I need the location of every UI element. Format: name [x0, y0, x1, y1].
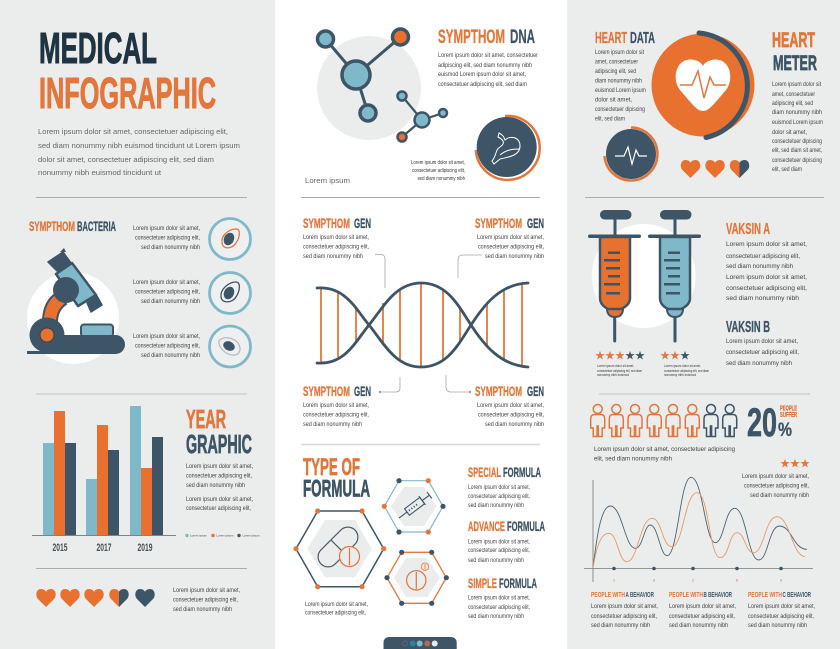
block: vaksin b [726, 319, 799, 367]
tiny text: vaksin a [597, 364, 642, 377]
block: vaksin a: VAKSIN A [726, 221, 770, 238]
pager [384, 637, 457, 649]
text: year graphic: Lorem ipsum dolor sit amet, [186, 496, 253, 503]
block: advance formula: consectetuer adipiscing elit, [468, 547, 530, 554]
icon row: small hearts [681, 160, 749, 178]
label: gen top right: SYMPTHOM [475, 215, 522, 231]
block: simple formula: FORMULA [499, 575, 537, 591]
text: stomach note: sed diam nonummy nibh [418, 176, 465, 182]
icon: bacteria 3 [210, 326, 250, 367]
block: behavior a: A BEHAVIOR [626, 590, 654, 599]
line chart: 2 [692, 578, 695, 582]
text: chart note: Lorem ipsum dolor sit amet, [742, 473, 809, 480]
text: symptom dna [438, 52, 539, 88]
intro text block: Lorem ipsum dolor sit amet, consectetuer adipiscing elit, [38, 127, 228, 136]
text: under capsule: Lorem ipsum dolor sit amet, [305, 601, 368, 608]
rating stars: chart: ★ [800, 456, 810, 470]
block: simple formula: Lorem ipsum dolor sit amet, [468, 594, 530, 602]
label: gen top left: sed diam nonummy nibh [303, 253, 363, 260]
heading: symptom dna: SYMPTHOM [438, 27, 505, 48]
label: gen top right: sed diam nonummy nibh [485, 253, 544, 260]
block: behavior b: B BEHAVIOR [704, 590, 732, 599]
rating stars: vaksin a: ★ [615, 348, 625, 362]
text: hearts: sed diam nonummy nibh [173, 606, 232, 613]
label: gen top left: GEN [354, 215, 371, 231]
heading: type of formula: FORMULA [303, 476, 370, 502]
text: symptom dna: Lorem ipsum dolor sit amet, consectetuer [438, 52, 539, 59]
block: simple formula [468, 575, 537, 620]
text: symptom dna: euismod Lorem ipsum dolor sit amet, [438, 71, 526, 78]
text: heart meter: amet, consectetuer [772, 91, 816, 98]
block: advance formula [468, 518, 545, 564]
rating stars: vaksin a: ★ [605, 348, 615, 362]
icon: syringe hexagon [382, 478, 446, 535]
heading: type of formula [303, 454, 370, 502]
block: vaksin a: sed diam nonummy nibh [726, 295, 799, 302]
icon: molecules [317, 29, 447, 142]
block: behavior c: Lorem ipsum dolor sit amet, [748, 603, 815, 610]
text: bacteria 1: consectetuer adipiscing elit, [135, 234, 200, 242]
block: special formula: Lorem ipsum dolor sit amet, [468, 484, 530, 491]
text: chart note: sed diam nonummy nibh [750, 492, 809, 499]
text: heart meter: adipiscing elit, sed [772, 100, 813, 107]
background: left panel [0, 0, 275, 649]
connectors: dna callouts [375, 254, 482, 393]
block: behavior a [591, 590, 658, 629]
intro text block [38, 127, 240, 177]
block: advance formula: Lorem ipsum dolor sit amet, [468, 538, 530, 546]
caption: lorem ipsum: Lorem ipsum [305, 176, 350, 185]
text: bacteria 2: consectetuer adipiscing elit, [135, 288, 200, 296]
heading: year graphic: YEAR [186, 404, 226, 434]
heading: symptom dna: DNA [510, 27, 535, 48]
heading: symptom bacteria: SYMPTHOM [29, 218, 75, 234]
text: bacteria 3: consectetuer adipiscing elit, [135, 342, 200, 350]
chart legend: Lorem ipsum [242, 534, 260, 538]
label: gen bottom left: sed diam nonummy nibh [303, 421, 362, 428]
heading: year graphic: GRAPHIC [186, 429, 252, 459]
block: vaksin b: consectetuer adipiscing elit, [726, 349, 799, 356]
block: vaksin a: consectetuer adipiscing elit, [726, 253, 800, 260]
block: vaksin a: consectetuer adipiscing elit, [726, 285, 807, 292]
text: heart data: dolor sit amet, [595, 96, 632, 104]
block: vaksin a: sed diam nonummy nibh [726, 263, 793, 270]
label: gen bottom right: GEN [527, 383, 544, 399]
block: vaksin a: Lorem ipsum dolor sit amet, [726, 274, 807, 281]
label: gen top left: Lorem ipsum dolor sit amet, [303, 234, 369, 241]
icon row: hearts [36, 589, 155, 607]
bar chart: year graphic [32, 406, 176, 554]
rating stars: vaksin b: ★ [660, 348, 670, 362]
block: behavior b [669, 590, 736, 629]
icon: bacteria 1 [210, 218, 250, 260]
block: behavior c [748, 590, 815, 629]
rating stars: vaksin a: ★ [595, 348, 605, 362]
text: heart meter: dolor sit amet, [772, 129, 807, 136]
text: heart data: diam nonummy nibh [595, 78, 642, 84]
text: bacteria 1: sed diam nonummy nibh [141, 244, 200, 251]
label: gen top right [475, 215, 544, 260]
text: people: Lorem ipsum dolor sit amet, consectetuer adipiscing [594, 446, 735, 453]
block: behavior a: Lorem ipsum dolor sit amet, [591, 603, 658, 610]
text: heart data: consectetuer dipiscing [595, 106, 645, 113]
icon: bacteria 2 [210, 272, 250, 314]
rating stars: chart: ★ [790, 456, 800, 470]
icon: syringes [588, 210, 701, 341]
line chart: 9 [780, 578, 783, 582]
rating stars: vaksin b: ★ [670, 348, 680, 362]
heading: heart meter [772, 29, 817, 75]
label: gen bottom right: Lorem ipsum dolor sit amet, [477, 402, 544, 409]
label: gen bottom left [303, 383, 371, 428]
text: heart meter: diam nonummy nibh [772, 109, 822, 116]
text: bacteria 1 [133, 225, 200, 251]
heading: heart data: HEART [595, 30, 627, 47]
block: vaksin b: Lorem ipsum dolor sit amet, [726, 338, 798, 345]
tiny text: vaksin b: Lorem ipsum dolor sit amet, [664, 364, 701, 368]
text: bacteria 3: sed diam nonummy nibh [141, 352, 200, 359]
chart legend [185, 534, 260, 538]
text: heart data: Lorem ipsum dolor sit [595, 49, 644, 56]
heading: symptom bacteria: BACTERIA [77, 218, 116, 234]
block: behavior b: sed diam nonummy nibh [669, 622, 728, 629]
text: heart meter: elit, sed diam [772, 166, 802, 173]
syringe: orange [588, 210, 641, 341]
label: gen top right: Lorem ipsum dolor sit amet, [477, 234, 544, 241]
block: vaksin a [726, 221, 807, 302]
rating stars: vaksin a: ★ [625, 348, 635, 362]
tiny text: vaksin b [664, 364, 709, 377]
block: behavior c: C BEHAVIOR [782, 590, 811, 599]
block: simple formula: sed diam nonummy nibh [468, 613, 524, 620]
block: behavior b: consectetuer adipiscing elit, [669, 613, 735, 620]
panel: symptom bacteria [27, 218, 250, 367]
text: stomach note: Lorem ipsum dolor sit amet, [411, 160, 465, 166]
icon: microscope [27, 248, 125, 364]
stat: 20 percent: SUFFER [780, 412, 797, 419]
stat: 20 percent: % [778, 420, 792, 441]
intro text block: sed diam nonummy nibh euismod tincidunt ut Lorem ipsum [38, 141, 240, 150]
heading: year graphic [186, 404, 252, 459]
pictogram: people [591, 404, 737, 436]
title: MEDICAL [39, 24, 157, 73]
block: vaksin a: Lorem ipsum dolor sit amet, [726, 241, 807, 248]
block: special formula [468, 464, 541, 509]
rating stars: vaksin b: ★ [680, 348, 690, 362]
icon: heart meter [652, 33, 754, 138]
label: gen bottom left: GEN [354, 383, 371, 399]
stat: 20 percent: PEOPLE [780, 406, 797, 412]
intro text block: dolor sit amet, consectetuer adipiscing elit, sed diam [38, 155, 214, 164]
text: under capsule [305, 601, 368, 616]
text: heart data [595, 49, 646, 122]
block: special formula: SPECIAL [468, 464, 501, 480]
text: bacteria 2 [133, 279, 200, 305]
rating stars: chart [780, 456, 810, 470]
tiny text: vaksin b: nonummy nibh euismod [664, 373, 696, 377]
line chart: 1 [613, 578, 616, 582]
text: heart meter [772, 81, 823, 173]
text: heart data: euismod Lorem ipsum [595, 87, 646, 94]
text: chart note [742, 473, 809, 499]
block: special formula: sed diam nonummy nibh [468, 502, 524, 509]
label: gen bottom right [475, 383, 544, 428]
text: heart data: adipiscing elit, sed [595, 68, 636, 75]
text: heart data: amet, consectetuer [595, 58, 639, 66]
block: behavior b: PEOPLE WITH [669, 590, 703, 599]
text: hearts: consectetuer adipiscing elit, [173, 596, 238, 604]
text: heart meter: Lorem ipsum dolor sit [772, 81, 821, 88]
line chart: 8 [653, 578, 656, 582]
label: gen bottom left: SYMPTHOM [303, 383, 350, 399]
text: heart meter: consectetuer dipiscing [772, 157, 822, 164]
text: symptom dna: adipiscing elit, sed diam nonummy nibh [438, 62, 532, 69]
text: heart meter: consectetuer dipiscing [772, 138, 822, 145]
block: behavior a: sed diam nonummy nibh [591, 622, 650, 629]
rating stars: vaksin b [660, 348, 690, 362]
icon: pulse circle [604, 128, 657, 180]
block: special formula: consectetuer adipiscing elit, [468, 493, 530, 500]
title [39, 24, 216, 118]
block: advance formula: ADVANCE [468, 518, 505, 534]
text: heart meter: euismod Lorem ipsum [772, 119, 823, 126]
label: gen bottom left: consectetuer adipiscing elit, [303, 412, 369, 418]
text: year graphic [186, 463, 253, 512]
text: year graphic: Lorem ipsum dolor sit amet, [186, 463, 253, 470]
block: vaksin b: VAKSIN B [726, 319, 770, 336]
text: heart data: elit, sed diam [595, 116, 625, 122]
text: heart meter: elit, sed diam sit amet, [772, 147, 822, 154]
text: bacteria 2: Lorem ipsum dolor sit amet, [133, 279, 200, 286]
label: gen top right: GEN [527, 215, 544, 231]
stat: 20 percent: 20 [747, 401, 777, 445]
text: under capsule: consectetuer adipiscing elit, [305, 610, 366, 616]
label: gen bottom right: sed diam nonummy nibh [485, 421, 544, 428]
label: gen bottom right: SYMPTHOM [475, 383, 522, 399]
label: gen bottom left: Lorem ipsum dolor sit amet, [303, 402, 369, 409]
chart: dna helix [317, 283, 528, 367]
block: behavior c: sed diam nonummy nibh [748, 622, 807, 629]
text: stomach note: consectetuer adipiscing elit, [412, 168, 465, 174]
line chart [584, 477, 813, 582]
tiny text: vaksin a: consectetuer adipiscing elit, sed diam [597, 369, 642, 373]
intro text block: nonummy nibh euismod tincidunt ut [38, 168, 162, 177]
title: INFOGRAPHIC [39, 69, 216, 118]
background: centre panel [275, 0, 567, 649]
rating stars: vaksin a [595, 348, 645, 362]
label: gen top left: SYMPTHOM [303, 215, 350, 231]
bar chart: year graphic: 2019 [138, 542, 152, 554]
icon: stomach [476, 116, 540, 180]
text: people: elit, sed diam nonummy nibh [594, 456, 672, 462]
text: symptom dna: consectetuer adipiscing elit, sed diam [438, 81, 527, 88]
label: gen top left [303, 215, 371, 260]
icon: tablets hexagon [384, 550, 449, 606]
tiny text: vaksin a: Lorem ipsum dolor sit amet, [597, 364, 634, 368]
bar chart: year graphic: 2017 [96, 542, 112, 554]
block: advance formula: FORMULA [507, 518, 545, 534]
text: hearts [173, 587, 240, 613]
text: year graphic: consectetuer adipiscing elit, [186, 472, 252, 480]
tiny text: vaksin b: consectetuer adipiscing elit, sed diam [664, 369, 709, 373]
bar chart: year graphic: 2015 [52, 542, 68, 554]
text: bacteria 3 [133, 333, 200, 359]
block: behavior c: PEOPLE WITH [748, 590, 782, 599]
block: special formula: FORMULA [503, 464, 541, 480]
text: stomach note [411, 160, 465, 182]
tiny text: vaksin a: nonummy nibh euismod [597, 373, 629, 377]
background: right panel [567, 0, 840, 649]
block: behavior a: consectetuer adipiscing elit, [591, 613, 657, 620]
rating stars: vaksin a: ★ [635, 348, 645, 362]
label: gen top right: consectetuer adipiscing elit, [478, 244, 544, 250]
block: advance formula: sed diam nonummy nibh [468, 557, 524, 564]
text: hearts: Lorem ipsum dolor sit amet, [173, 587, 240, 594]
text: year graphic: consectetuer adipiscing elit, [186, 505, 251, 512]
text: bacteria 3: Lorem ipsum dolor sit amet, [133, 333, 200, 340]
block: behavior b: Lorem ipsum dolor sit amet, [669, 603, 736, 610]
text: bacteria 2: sed diam nonummy nibh [141, 298, 200, 305]
label: gen bottom right: consectetuer adipiscing elit, [478, 412, 544, 418]
chart legend: Lorem ipsum [190, 534, 207, 538]
text: people [594, 446, 735, 462]
text: chart note: consectetuer adipiscing elit, [744, 482, 809, 490]
syringe: teal [648, 210, 701, 341]
heading: heart data: DATA [630, 30, 655, 47]
block: vaksin b: sed diam nonummy nibh [726, 360, 792, 367]
chart legend: Lorem ipsum [216, 534, 234, 538]
rating stars: chart: ★ [780, 456, 790, 470]
text: year graphic: sed diam nonummy nibh [186, 482, 245, 489]
label: gen top left: consectetuer adipiscing elit, [303, 244, 369, 250]
line chart: 8 [736, 578, 739, 582]
block: simple formula: SIMPLE [468, 575, 497, 591]
heading: type of formula: TYPE OF [303, 454, 360, 481]
block: behavior a: PEOPLE WITH [591, 590, 625, 599]
text: bacteria 1: Lorem ipsum dolor sit amet, [133, 225, 200, 232]
block: simple formula: consectetuer adipiscing elit, [468, 604, 530, 611]
block: behavior c: consectetuer adipiscing elit, [748, 613, 814, 620]
icon: capsule hexagon [293, 508, 386, 589]
